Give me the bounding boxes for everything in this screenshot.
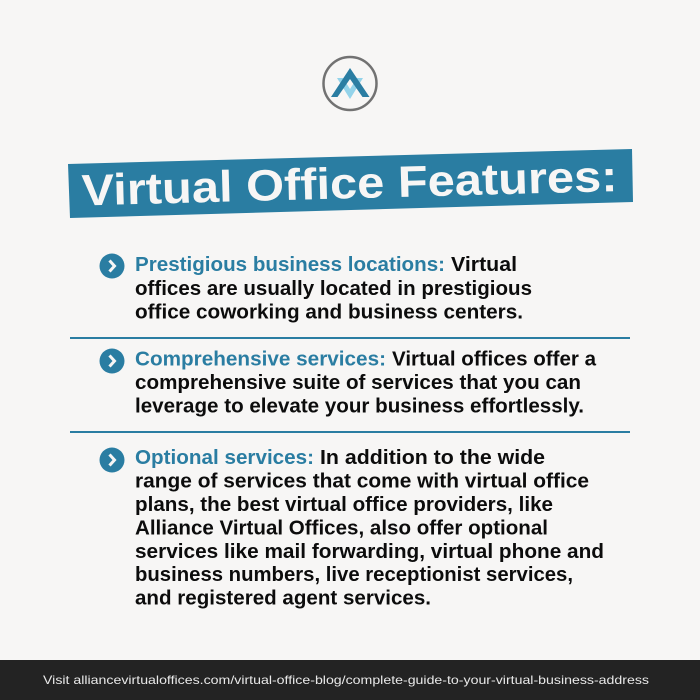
logo <box>324 57 376 110</box>
text: optional services: Optional services: <box>135 446 314 469</box>
text: optional services: services like mail forwarding, virtual phone and <box>135 541 604 563</box>
text: optional services: plans, the best virtual office providers, like <box>135 494 553 516</box>
text: prestigious business locations <box>135 253 532 324</box>
text: optional services: and registered agent services. <box>135 588 431 610</box>
text: comprehensive services: leverage to elevate your business effortlessly. <box>135 396 584 418</box>
title banner <box>68 149 633 218</box>
footer bar <box>0 660 700 700</box>
text: comprehensive services <box>135 348 597 418</box>
text: optional services <box>135 446 604 610</box>
text: prestigious business locations: offices are usually located in prestigious <box>135 278 532 300</box>
icon: chevron bullet <box>100 448 124 472</box>
icon: chevron bullet <box>100 348 124 374</box>
text: comprehensive services: Comprehensive services: <box>135 348 386 370</box>
text: optional services: In addition to the wide <box>320 447 545 469</box>
icon: chevron bullet <box>100 254 124 278</box>
title: Virtual Office Features: <box>81 152 618 215</box>
text: comprehensive services: comprehensive suite of services that you can <box>135 372 581 394</box>
text: prestigious business locations: Prestigious business locations: <box>135 253 445 276</box>
footer link text: Visit alliancevirtualoffices.com/virtual-office-blog/complete-guide-to-your-virtual-business-address <box>43 673 649 687</box>
panel: prestigious business locations <box>100 253 532 324</box>
panel: optional services <box>100 446 604 610</box>
text: prestigious business locations: office coworking and business centers. <box>135 302 523 324</box>
panel: comprehensive services <box>100 348 597 418</box>
text: comprehensive services: Virtual offices offer a <box>392 348 597 370</box>
text: optional services: Alliance Virtual Offices, also offer optional <box>135 518 548 540</box>
text: optional services: range of services that come with virtual office <box>135 470 589 492</box>
text: prestigious business locations: Virtual <box>451 254 517 276</box>
text: optional services: business numbers, live receptionist services, <box>135 564 573 586</box>
